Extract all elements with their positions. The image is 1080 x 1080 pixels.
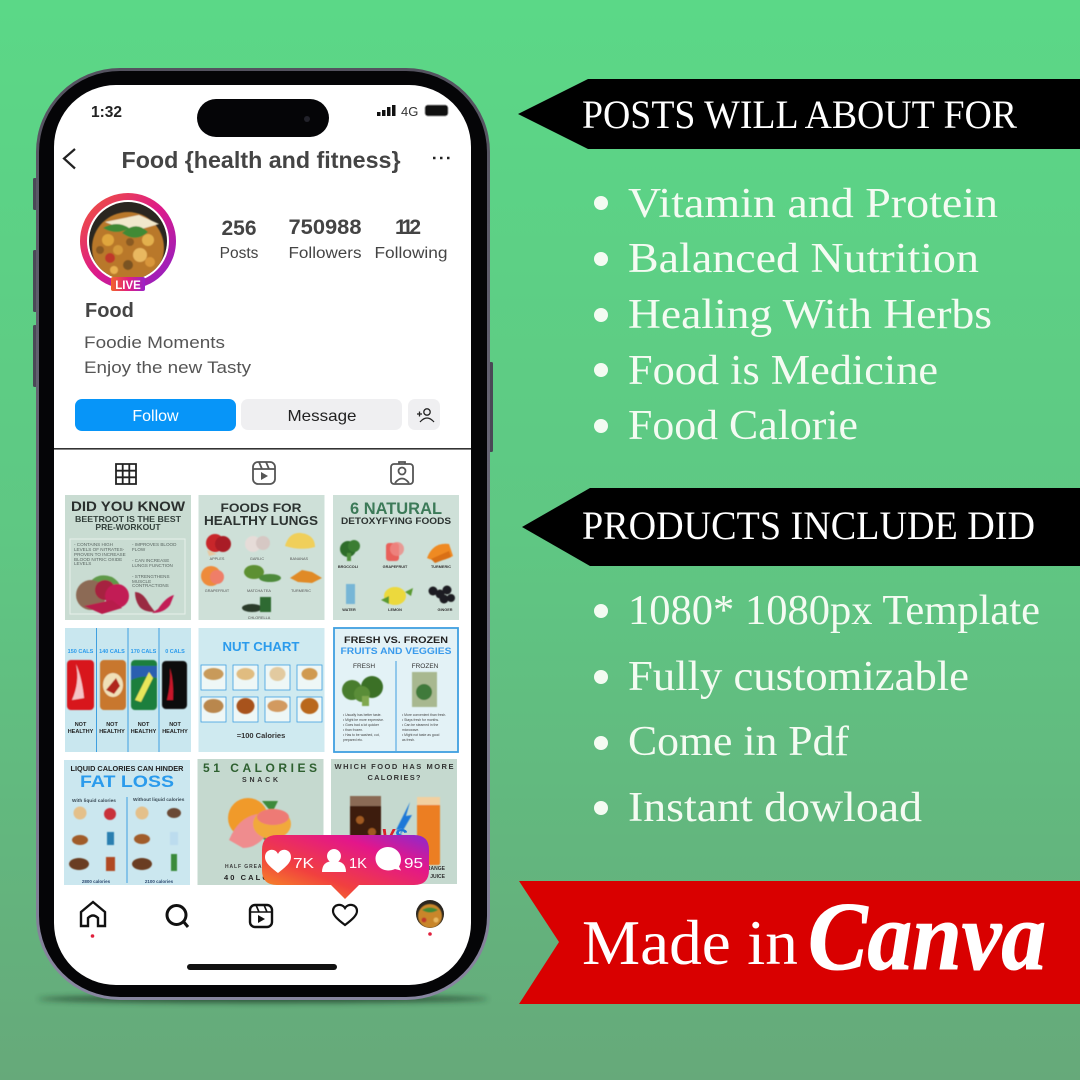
post: did you know: - STRENGTHENS: [132, 574, 170, 579]
post: soda calories: NOT: [138, 722, 150, 728]
post: fresh vs frozen: FRESH VS. FROZEN: [344, 635, 448, 646]
post: 51 calories snack: 51 CALORIES: [203, 761, 317, 775]
post: liquid calories: 2800 calories: [82, 879, 111, 884]
post: 51 calories snack: [198, 759, 324, 885]
list: post topics: [594, 181, 998, 449]
list: product features: [594, 588, 1040, 831]
post: which food has more calories: V: [381, 826, 396, 848]
post: foods for healthy lungs: BANANAS: [290, 557, 309, 561]
post: which food has more calories: WHICH FOOD HAS MORE: [334, 762, 454, 771]
list: post topics: Food Calorie: [628, 403, 858, 449]
post: did you know: - CONTAINS HIGH: [74, 542, 113, 547]
post: natural detoxifying foods: 6 NATURAL: [350, 499, 442, 518]
list: product features: Fully customizable: [628, 654, 969, 700]
post: natural detoxifying foods: DETOXYFYING FOODS: [341, 516, 451, 527]
list: post topics: Healing With Herbs: [628, 292, 992, 338]
icon: speech bubble: [376, 847, 401, 870]
post: did you know: BEETROOT IS THE BEST: [75, 514, 182, 524]
post: fresh vs frozen: FRUITS AND VEGGIES: [340, 646, 452, 657]
post: liquid calories: Without liquid calories: [133, 797, 185, 803]
post: natural detoxifying foods: [333, 495, 459, 620]
post: natural detoxifying foods: GRAPEFRUIT: [383, 565, 408, 569]
post: foods for healthy lungs: APPLES: [210, 557, 225, 561]
post: fresh vs frozen: • than frozen.: [343, 728, 363, 732]
profile stats: 112: [395, 216, 421, 239]
icon: person: [322, 849, 346, 872]
profile buttons: Follow: [132, 408, 179, 425]
notification badge: 95: [404, 855, 423, 872]
banner: products include did: PRODUCTS INCLUDE DID: [582, 503, 1035, 548]
profile buttons: Message: [288, 408, 357, 425]
profile bio: Food: [85, 300, 134, 322]
post: fresh vs frozen: • Usually has better taste.: [343, 713, 382, 717]
post: natural detoxifying foods: LEMON: [388, 608, 402, 612]
post: 51 calories snack: 40 CALORIES: [224, 873, 294, 882]
profile stats: Followers: [288, 245, 362, 262]
profile stats: Posts: [220, 245, 259, 262]
post: liquid calories: FAT LOSS: [80, 772, 174, 791]
post: did you know: LEVELS: [74, 561, 91, 566]
list: post topics: Balanced Nutrition: [628, 236, 979, 282]
profile stats: 256: [221, 217, 257, 240]
post: did you know: FLOW: [132, 547, 146, 552]
status bar: [91, 99, 448, 137]
post: liquid calories: LIQUID CALORIES CAN HINDER: [70, 766, 184, 773]
post: did you know: [65, 495, 191, 620]
post: foods for healthy lungs: CHLORELLA: [248, 616, 271, 620]
post grid: [64, 495, 459, 885]
post: foods for healthy lungs: FOODS FOR: [220, 501, 302, 515]
post: foods for healthy lungs: TURMERIC: [291, 589, 311, 593]
list: product features: Instant dowload: [628, 785, 922, 831]
post: fresh vs frozen: • Can be steamed in the: [402, 723, 438, 727]
post: soda calories: HEALTHY: [99, 729, 125, 735]
divider line: [54, 448, 471, 450]
banner: posts will about for: POSTS WILL ABOUT FOR: [582, 92, 1017, 137]
banner: made in canva: [519, 881, 1080, 1004]
post: fresh vs frozen: • Stays fresh for months.: [402, 718, 439, 722]
post: liquid calories: With liquid calories: [72, 798, 116, 804]
post: did you know: - IMPROVES BLOOD: [132, 542, 177, 547]
post: fresh vs frozen: • Might not taste as good: [402, 733, 439, 737]
post: fresh vs frozen: • Might be more expensive.: [343, 718, 384, 722]
icon: heart: [265, 850, 291, 873]
icon: heart outline: [333, 905, 357, 925]
profile bio: [84, 300, 252, 377]
post: which food has more calories: [331, 759, 457, 884]
post: did you know: CONTRACTIONS: [132, 583, 169, 588]
list: product features: 1080* 1080px Template: [628, 588, 1040, 634]
list: post topics: Vitamin and Protein: [628, 181, 998, 227]
profile avatar: LIVE: [115, 280, 141, 292]
profile stats: 750988: [288, 216, 362, 239]
post: soda calories: HEALTHY: [131, 729, 157, 735]
post: soda calories: 0 CALS: [165, 649, 185, 655]
post: fresh vs frozen: • Has to be washed, cut,: [343, 733, 380, 737]
post: soda calories: NOT: [106, 722, 118, 728]
status bar: 4G: [401, 104, 418, 119]
banner: products include did: [522, 488, 1080, 566]
post: did you know: LUNGS FUNCTION: [132, 563, 173, 568]
post: which food has more calories: ORANGE: [423, 866, 446, 872]
post: which food has more calories: JUICE: [430, 874, 446, 880]
profile bio: Enjoy the new Tasty: [84, 358, 252, 377]
notification badge: [262, 835, 429, 899]
profile bio: Foodie Moments: [84, 333, 225, 352]
post: soda calories: HEALTHY: [162, 729, 188, 735]
post: soda calories: HEALTHY: [68, 729, 94, 735]
post: natural detoxifying foods: GINGER: [438, 608, 453, 612]
notification badge: 1K: [349, 855, 367, 872]
post: fresh vs frozen: • More convenient than fresh.: [402, 713, 446, 717]
profile buttons: [75, 399, 440, 431]
home indicator: [187, 964, 337, 970]
post: did you know: BLOOD NITRIC OXIDE: [74, 557, 122, 562]
icon: home: [81, 902, 105, 926]
post: 51 calories snack: SNACK: [242, 777, 278, 784]
notification badge: 7K: [293, 855, 314, 872]
icon: search: [167, 906, 188, 927]
post: did you know: PRE-WORKOUT: [95, 522, 161, 532]
post: nut chart: NUT CHART: [222, 640, 300, 654]
post: soda calories: 150 CALS: [68, 649, 94, 655]
post: natural detoxifying foods: BROCCOLI: [338, 565, 358, 569]
post: fresh vs frozen: FROZEN: [412, 663, 439, 670]
post: natural detoxifying foods: WATER: [342, 608, 356, 612]
post: fresh vs frozen: as fresh.: [402, 738, 415, 742]
post: did you know: DID YOU KNOW: [71, 499, 185, 514]
post: fresh vs frozen: FRESH: [353, 663, 375, 670]
post: foods for healthy lungs: MATCHA TEA: [247, 589, 271, 593]
post: fresh vs frozen: • Goes bad a lot quicker: [343, 723, 380, 727]
post: liquid calories: [64, 760, 190, 885]
banner: made in canva: Made in: [582, 908, 798, 978]
post: liquid calories: 2100 calories: [145, 879, 174, 884]
post: foods for healthy lungs: HEALTHY LUNGS: [204, 514, 318, 528]
post: fresh vs frozen: prepared etc.: [343, 738, 363, 742]
post: soda calories: [65, 628, 191, 752]
profile avatar: [84, 196, 172, 292]
post: foods for healthy lungs: GARLIC: [250, 557, 264, 561]
bottom navigation: [81, 900, 444, 938]
post: foods for healthy lungs: [198, 495, 324, 620]
banner: posts will about for: [518, 79, 1080, 149]
profile stats: [220, 216, 448, 262]
post: fresh vs frozen: microwave.: [402, 728, 419, 732]
list: product features: Come in Pdf: [628, 719, 849, 765]
post: nut chart: =100 Calories: [237, 731, 285, 740]
phone mockup: [33, 68, 493, 1003]
post: which food has more calories: CALORIES?: [368, 773, 421, 782]
post: soda calories: 170 CALS: [131, 649, 157, 655]
post: did you know: MUSCLE: [132, 579, 151, 584]
banner: made in canva: Canva: [808, 883, 1046, 991]
icon: reels: [250, 905, 272, 927]
icon: profile thumbnail: [416, 900, 444, 928]
post: soda calories: 140 CALS: [99, 649, 125, 655]
post: 51 calories snack: HALF GREAPFRUIT: [225, 864, 285, 870]
profile header: Food {health and fitness}: [122, 147, 401, 173]
list: post topics: Food is Medicine: [628, 348, 938, 394]
profile stats: Following: [374, 245, 448, 262]
post: soda calories: NOT: [75, 722, 87, 728]
post: did you know: PROVEN TO INCREASE: [74, 552, 126, 557]
status bar: 1:32: [91, 104, 122, 121]
post: soda calories: NOT: [169, 722, 181, 728]
post: nut chart: [198, 628, 324, 752]
tab icons: [116, 462, 413, 484]
post: natural detoxifying foods: TURMERIC: [431, 565, 451, 569]
post: did you know: - CAN INCREASE: [132, 558, 169, 563]
post: did you know: LEVELS OF NITRATES-: [74, 547, 125, 552]
post: fresh vs frozen: [334, 628, 458, 752]
post: which food has more calories: S: [394, 826, 408, 848]
post: foods for healthy lungs: GRAPEFRUIT: [205, 589, 230, 593]
